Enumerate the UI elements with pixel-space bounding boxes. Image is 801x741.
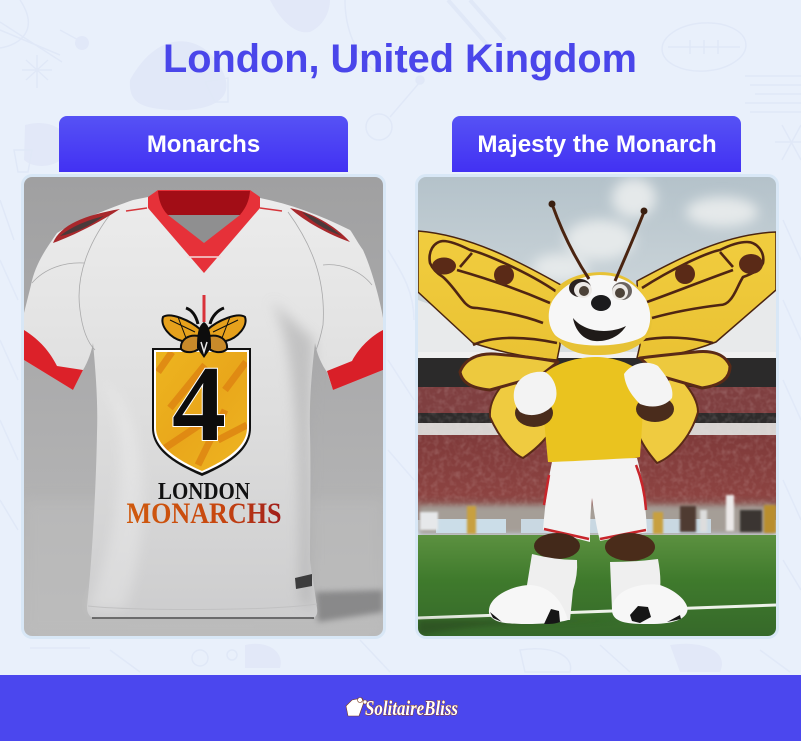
red sleeve cuffs <box>24 330 83 390</box>
upper right wing <box>637 232 776 358</box>
upper left wing <box>418 231 561 360</box>
wing spots <box>432 254 763 285</box>
wrists <box>515 407 553 427</box>
sleeve patches <box>53 209 120 243</box>
tab: Majesty the Monarch <box>452 116 741 172</box>
mascot <box>418 200 776 624</box>
jersey wordmark: LONDON: LONDON <box>158 479 251 505</box>
fur legs <box>534 533 580 559</box>
jersey wordmark: MONARCHS: MONARCHS <box>126 497 282 530</box>
logo: Solitaire Bliss <box>346 696 458 720</box>
logo: Solitaire Bliss: SolitaireBliss <box>365 696 458 720</box>
wing flaps <box>489 384 546 459</box>
tab: Majesty the Monarch: Majesty the Monarch <box>477 131 717 158</box>
title: London, United Kingdom <box>163 37 637 81</box>
jersey body <box>24 190 383 619</box>
numeral 4: 4 <box>172 345 226 464</box>
footer bar <box>0 675 801 741</box>
torso <box>540 357 645 463</box>
icon: card and dice cluster <box>346 698 367 716</box>
butterfly emblem <box>162 308 246 358</box>
nose <box>591 295 611 311</box>
lower wings <box>460 354 558 390</box>
panel: mascot photo <box>416 175 778 638</box>
eyes <box>569 279 591 297</box>
boots and football feet <box>525 554 577 620</box>
wing veins <box>430 241 763 345</box>
mouth <box>573 318 626 341</box>
head <box>555 272 646 355</box>
panel: jersey photo <box>22 175 385 638</box>
shorts <box>543 458 647 542</box>
shield crest <box>152 295 251 476</box>
fists <box>514 372 556 415</box>
stadium scene <box>418 177 776 636</box>
jersey tag <box>295 574 312 589</box>
tab: Monarchs <box>59 116 348 172</box>
antennae <box>552 204 644 281</box>
tab: Monarchs: Monarchs <box>147 131 260 158</box>
red collar <box>148 190 260 273</box>
